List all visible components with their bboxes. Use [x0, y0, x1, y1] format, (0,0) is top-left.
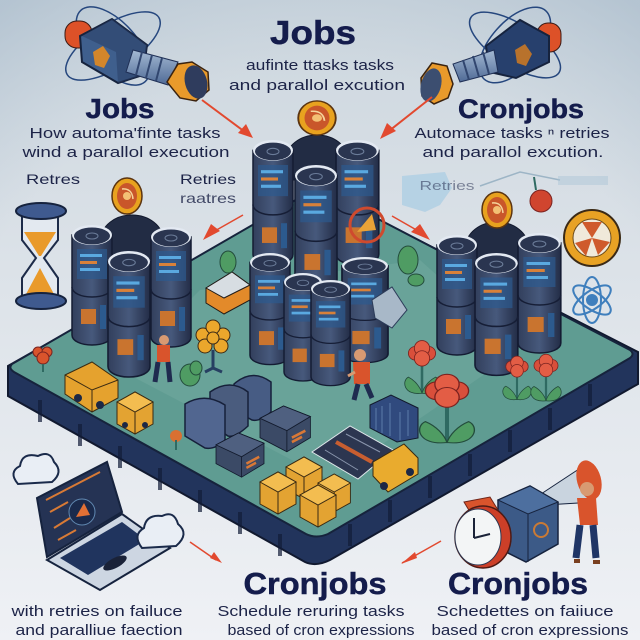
icon: box and megaphone — [498, 458, 606, 562]
icon: right telescope — [417, 0, 570, 104]
icon: right cloud — [137, 514, 184, 548]
heading: left jobs — [21, 93, 230, 161]
gold truck right — [373, 444, 418, 492]
text: bottom left: with retries on failuce — [10, 603, 183, 620]
slate crates — [216, 406, 310, 477]
label: retries — [26, 171, 236, 206]
heading: left jobs: Jobs — [86, 93, 154, 124]
icon: laptop — [37, 462, 170, 590]
label: retries: Retries — [180, 171, 236, 187]
arrow: centre to left cluster — [203, 215, 243, 240]
truck: left orange — [65, 362, 118, 412]
gold boxes — [260, 457, 350, 527]
label: retries: raatres — [180, 190, 236, 206]
flower: orange small — [170, 430, 182, 450]
truck: small — [117, 392, 153, 434]
arrow: left telescope to cluster — [202, 100, 253, 138]
arrow: centre to right cluster — [392, 216, 430, 240]
small red flower left — [33, 347, 52, 372]
person: centre — [348, 349, 372, 400]
cluster: middle servers — [250, 253, 407, 386]
heading: right cronjobs: Cronjobs — [458, 94, 584, 124]
red flowers — [405, 341, 561, 443]
icon: left telescope — [56, 0, 211, 101]
shop box — [206, 272, 250, 314]
plant — [180, 246, 424, 386]
heading: right cronjobs: Automace tasks ⁿ retries — [414, 125, 610, 142]
icon: clock — [455, 497, 511, 568]
icon: gold wheel — [564, 210, 620, 266]
text: bottom left: and paralliue faection — [16, 622, 182, 639]
text: bottom right cronjobs — [432, 566, 628, 639]
mat panel — [312, 426, 393, 479]
heading: right cronjobs — [414, 94, 610, 161]
icon: hourglass — [16, 203, 66, 309]
yellow flower — [196, 320, 230, 372]
heading: top jobs: Jobs — [270, 14, 356, 51]
text: bottom centre cronjobs — [218, 566, 414, 639]
icon: left cloud — [13, 454, 59, 484]
text: bottom centre cronjobs: Cronjobs — [244, 566, 386, 601]
arrow: to clock — [401, 541, 441, 564]
cluster: centre-top servers — [253, 101, 384, 292]
text: bottom centre cronjobs: Schedule reruring tasks — [218, 603, 404, 620]
label: retries: Retres — [26, 171, 80, 187]
arrow: laptop to cronjobs — [190, 542, 222, 563]
heading: top jobs: aufinte ttasks tasks — [246, 58, 394, 74]
text: bottom right cronjobs: Schedettes on faiiuce — [436, 603, 614, 620]
text: bottom centre cronjobs: based of cron expressions — [228, 622, 414, 639]
blue container — [370, 395, 418, 442]
faded retries cloud: Retries — [420, 178, 475, 193]
heading: left jobs: How automa'finte tasks — [30, 125, 220, 142]
platform — [8, 190, 638, 564]
heading: top jobs — [229, 14, 405, 94]
text: bottom left — [10, 603, 183, 639]
arrow: right telescope to cluster — [380, 97, 432, 139]
person: left — [155, 335, 170, 382]
faded retries cloud — [402, 172, 608, 212]
heading: left jobs: wind a parallol execution — [21, 144, 230, 161]
heading: top jobs: and parallol excution — [229, 77, 405, 94]
cluster: right servers — [437, 192, 561, 375]
text: bottom right cronjobs: Cronjobs — [448, 566, 588, 601]
icon: red ball — [530, 177, 552, 212]
person: right — [574, 482, 600, 562]
tanks — [185, 375, 271, 448]
heading: right cronjobs: and parallol excution. — [422, 144, 604, 161]
cluster: left servers — [72, 178, 191, 377]
icon: atom — [569, 277, 615, 323]
text: bottom right cronjobs: based of cron expressions — [432, 622, 628, 639]
